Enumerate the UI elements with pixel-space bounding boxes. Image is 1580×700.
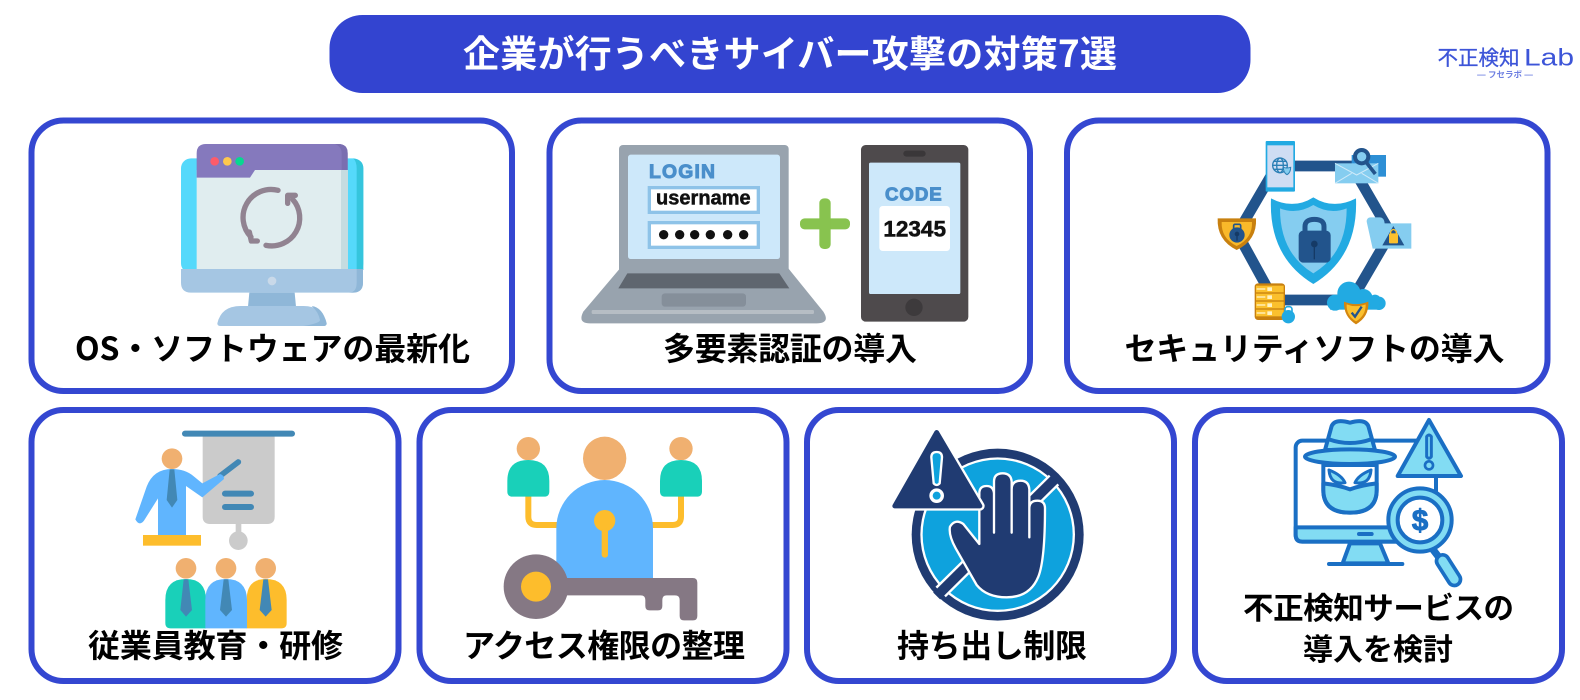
icon: laptop login plus phone code: 12345 <box>883 217 946 242</box>
icon: laptop login plus phone code: LOGIN <box>649 162 715 183</box>
logo: 不正検知 <box>1438 47 1520 70</box>
panel: fraud detection service <box>1195 410 1562 681</box>
title <box>330 15 1250 93</box>
label: 多要素認証の導入 <box>663 331 917 367</box>
panel: OS and software updates <box>32 120 512 391</box>
title: 企業が行うべきサイバー攻撃の対策7選 <box>463 24 1117 78</box>
icon: laptop login plus phone code <box>581 145 968 323</box>
icon: hacker on monitor with magnifier: $ <box>1412 504 1428 537</box>
panel: restrict taking data out <box>807 410 1174 681</box>
icon: hacker on monitor with magnifier <box>1296 420 1461 579</box>
icon: people and key <box>504 437 702 620</box>
logo: Lab <box>1524 44 1574 72</box>
label: セキュリティソフトの導入 <box>1124 331 1504 367</box>
label: 導入を検討 <box>1303 634 1453 667</box>
logo: ― フセラボ ― <box>1477 70 1533 80</box>
label: アクセス権限の整理 <box>463 628 745 664</box>
panel: multi-factor authentication <box>550 120 1030 391</box>
icon: presenter and audience <box>135 431 295 628</box>
label: 持ち出し制限 <box>897 628 1087 664</box>
icon: laptop login plus phone code: CODE <box>885 183 942 204</box>
panel: security software <box>1067 120 1548 391</box>
label: 不正検知サービスの <box>1243 592 1514 626</box>
label <box>1243 592 1514 667</box>
panel: access rights <box>420 410 786 681</box>
icon: monitor with refresh <box>181 144 363 326</box>
icon: stop hand with warning <box>895 432 1084 621</box>
logo <box>1438 44 1574 80</box>
label: 従業員教育・研修 <box>88 628 343 664</box>
icon: security hexagon with shield <box>1218 141 1411 324</box>
panel: employee education <box>32 410 398 681</box>
icon: laptop login plus phone code: username <box>656 187 751 209</box>
label: OS・ソフトウェアの最新化 <box>75 324 470 370</box>
